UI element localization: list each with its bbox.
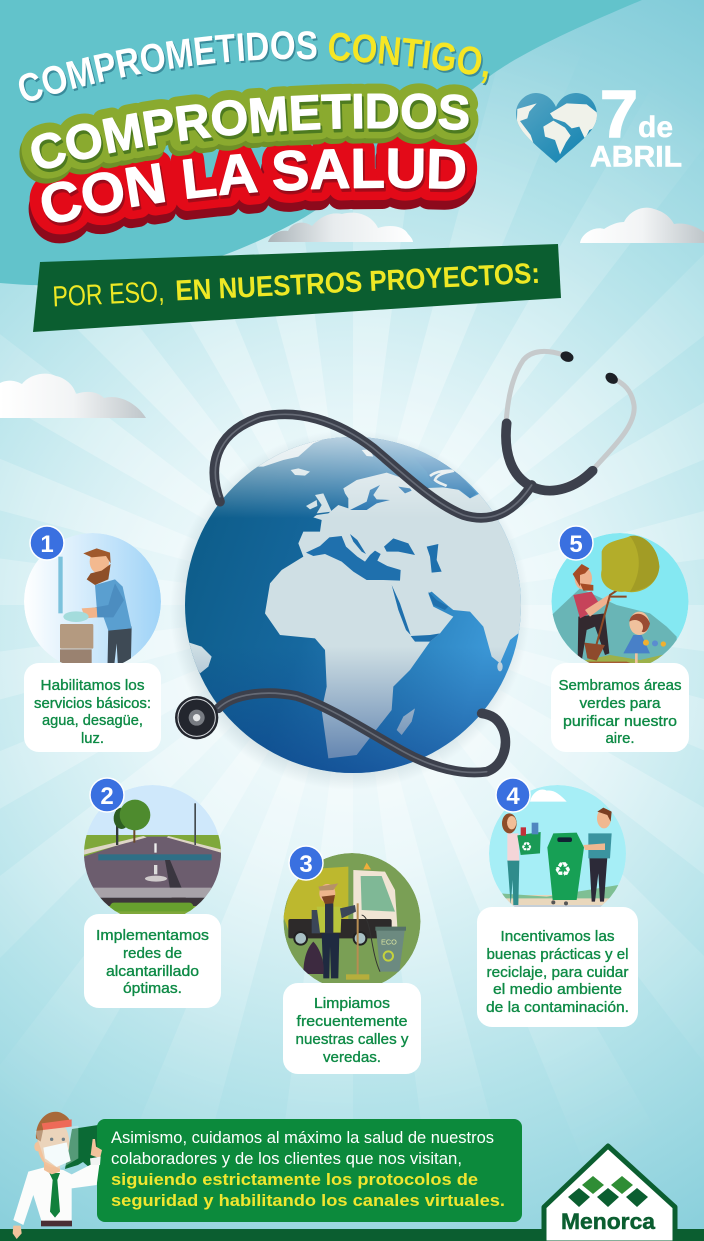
panel: item 2 <box>83 778 223 1008</box>
badge 1: 1 <box>40 531 54 558</box>
card text: Habilitamos los <box>40 677 144 694</box>
card text: veredas. <box>323 1049 381 1066</box>
card text: reciclaje, para cuidar <box>486 964 628 981</box>
title line 2: COMPROMETIDOS <box>33 96 470 172</box>
stethoscope <box>175 350 634 772</box>
title line 2: COMPROMETIDOS <box>31 93 469 169</box>
bubble text: Asimismo, cuidamos al máximo la salud de nuestros <box>111 1129 494 1147</box>
card text: alcantarillado <box>106 963 199 980</box>
speech bubble <box>65 1119 522 1222</box>
cloud left <box>0 374 146 418</box>
logo: Menorca <box>544 1146 675 1241</box>
bubble text: colaboradores y de los clientes que nos visitan, <box>111 1150 462 1168</box>
card text: Limpiamos <box>314 995 390 1012</box>
title line 1: COMPROMETIDOS CONTIGO, <box>18 31 488 101</box>
illustration: planting tree <box>550 533 688 673</box>
seas <box>306 457 477 581</box>
banner text <box>52 258 541 313</box>
illustration: street cleaner and truck: ECO <box>381 937 397 946</box>
panel: item 1 <box>24 526 161 752</box>
illustration: man with face shield <box>13 1112 102 1239</box>
card <box>84 914 221 1008</box>
badge 3 <box>289 846 323 880</box>
illustration: road with sewer <box>83 785 223 923</box>
badge 5: 5 <box>569 531 583 558</box>
ABRIL: ABRIL <box>590 140 682 174</box>
card text: Implementamos <box>96 927 209 944</box>
title line 1: COMPROMETIDOS CONTIGO, <box>24 35 490 103</box>
card text <box>34 677 151 747</box>
title line 3: CON LA SALUD <box>28 153 476 244</box>
card text: servicios básicos: <box>34 695 151 712</box>
illustration: recycling: ♻ <box>521 840 532 854</box>
card text: buenas prácticas y el <box>486 946 628 963</box>
banner <box>33 244 561 332</box>
card text <box>486 928 629 1016</box>
panel: item 3 <box>283 846 421 1074</box>
logo wordmark: Menorca <box>561 1209 656 1234</box>
continents <box>185 437 530 775</box>
card text: Incentivamos las <box>500 928 614 945</box>
panel: item 4 <box>477 778 638 1027</box>
card text: aire. <box>606 730 634 747</box>
badge 4 <box>496 778 530 812</box>
banner text: EN NUESTROS PROYECTOS: <box>175 258 541 307</box>
card text: el medio ambiente <box>493 981 622 998</box>
title line 3: CON LA SALUD <box>42 148 466 222</box>
badge 1 <box>30 526 64 560</box>
de: de <box>638 111 673 144</box>
bubble text: siguiendo estrictamente los protocolos de <box>111 1171 478 1189</box>
tubes <box>214 414 593 772</box>
card text: de la contaminación. <box>486 999 629 1016</box>
card text: nuestras calles y <box>296 1031 409 1048</box>
badge 2: 2 <box>100 783 114 810</box>
footer bar <box>0 1229 704 1241</box>
top swoosh <box>0 0 642 286</box>
badge 4: 4 <box>506 783 520 810</box>
cloud behind title <box>268 213 413 242</box>
title line 3: CON LA SALUD <box>30 136 478 234</box>
card text: luz. <box>81 730 104 747</box>
title <box>18 31 490 244</box>
card <box>283 983 421 1074</box>
panel: item 5 <box>550 526 689 752</box>
card <box>24 663 161 752</box>
card text: óptimas. <box>123 980 182 997</box>
illustration: man washing hands <box>24 533 161 673</box>
cloud top right <box>580 208 704 243</box>
badge 3: 3 <box>299 851 313 878</box>
chest piece <box>175 696 218 739</box>
title line 3: CON LA SALUD <box>44 151 468 226</box>
card <box>477 907 638 1027</box>
card text: frecuentemente <box>296 1013 408 1030</box>
card text <box>558 677 682 747</box>
date <box>590 77 682 174</box>
number 7: 7 <box>600 77 638 152</box>
bubble text: seguridad y habilitando los canales virtuales. <box>111 1192 505 1210</box>
badge 5 <box>559 526 593 560</box>
title line 2: COMPROMETIDOS <box>22 83 478 178</box>
badge 2 <box>90 778 124 812</box>
card text: redes de <box>123 945 182 962</box>
bubble text <box>111 1129 505 1210</box>
card text <box>296 995 409 1066</box>
globe <box>170 430 530 790</box>
banner text: POR ESO, <box>52 276 165 313</box>
illustration: street cleaner and truck <box>283 853 420 990</box>
logo diamonds <box>568 1176 648 1207</box>
illustration: recycling: ♻ <box>554 860 571 881</box>
card text: Sembramos áreas <box>558 677 682 694</box>
ear tubes <box>506 351 634 470</box>
card text: verdes para <box>580 695 661 712</box>
title line 2: COMPROMETIDOS <box>20 130 476 184</box>
card text <box>96 927 209 997</box>
illustration: recycling <box>489 785 626 907</box>
earpieces <box>559 350 575 364</box>
card <box>551 663 689 752</box>
card text: agua, desagüe, <box>42 712 143 729</box>
card text: purificar nuestro <box>563 713 677 730</box>
icon: heart globe <box>516 93 600 163</box>
